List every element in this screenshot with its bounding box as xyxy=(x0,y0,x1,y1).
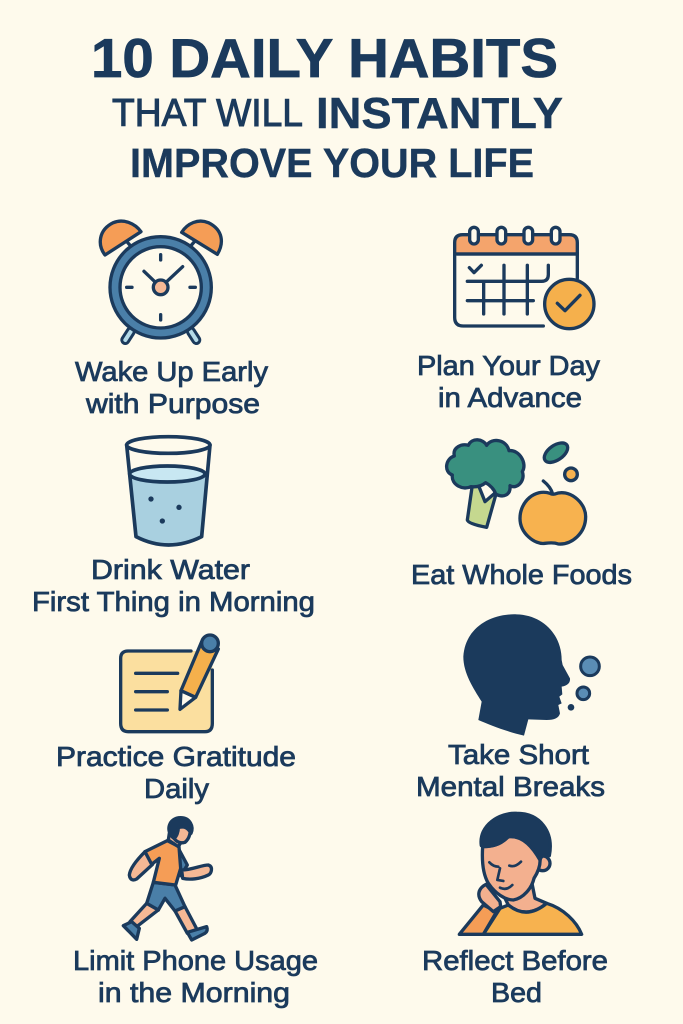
label xyxy=(416,739,605,802)
habit: plan your day xyxy=(417,227,600,413)
title: 10 DAILY HABITS xyxy=(91,27,558,89)
label xyxy=(422,945,608,1008)
icon: glass of water xyxy=(127,437,210,545)
habit: practice gratitude xyxy=(56,635,296,804)
label: Take Short xyxy=(448,739,589,770)
label: Plan Your Day xyxy=(417,350,600,381)
habit: mental breaks xyxy=(416,614,605,802)
label xyxy=(73,945,318,1008)
habit: eat whole foods xyxy=(411,439,632,590)
label xyxy=(32,554,315,617)
label: with Purpose xyxy=(85,388,260,419)
label xyxy=(417,350,600,413)
label: in Advance xyxy=(438,382,582,413)
label: Reflect Before xyxy=(422,945,608,976)
label: Daily xyxy=(144,773,209,804)
icon: walking person xyxy=(123,818,211,940)
habit: drink water xyxy=(32,437,315,617)
label xyxy=(75,356,268,419)
label: Bed xyxy=(491,977,542,1008)
label: Mental Breaks xyxy=(416,771,605,802)
label: First Thing in Morning xyxy=(32,586,315,617)
habit: limit phone usage xyxy=(73,818,318,1008)
icon: broccoli and apple xyxy=(447,439,586,544)
label: Practice Gratitude xyxy=(56,741,296,772)
title: IMPROVE YOUR LIFE xyxy=(130,140,534,186)
habit: reflect before bed xyxy=(422,813,608,1008)
icon: head silhouette with bubbles xyxy=(463,614,599,736)
label: Drink Water xyxy=(91,554,250,585)
habit: wake up early xyxy=(75,221,268,419)
icon: calendar xyxy=(455,227,594,329)
icon: alarm clock xyxy=(100,221,221,340)
label: Eat Whole Foods xyxy=(411,559,632,590)
label: in the Morning xyxy=(98,977,290,1008)
title: THAT WILL xyxy=(112,92,303,135)
title: INSTANTLY xyxy=(316,89,563,138)
icon: person reflecting xyxy=(459,813,582,934)
title xyxy=(91,27,563,186)
label: Wake Up Early xyxy=(75,356,268,387)
icon: notepad and pencil xyxy=(121,635,218,732)
label: Limit Phone Usage xyxy=(73,945,318,976)
label xyxy=(56,741,296,804)
